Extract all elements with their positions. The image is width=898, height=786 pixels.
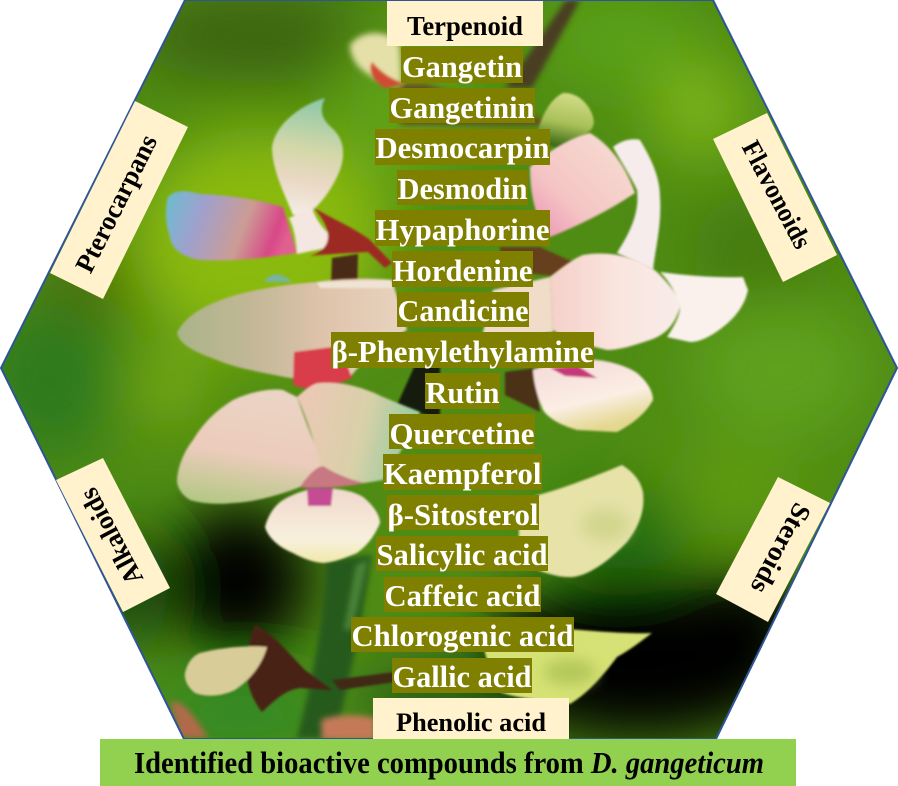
class label: Pterocarpans: Pterocarpans [69,130,163,277]
class label: Phenolic acid [373,698,569,740]
flower: lower big petals [177,382,420,504]
buds, top [350,33,594,148]
compound: Quercetine: Quercetine [390,416,534,451]
class label: Alkaloids [56,458,170,612]
title banner [100,739,796,786]
compound: Chlorogenic acid: Chlorogenic acid [352,618,574,653]
compound: Gangetin: Gangetin [402,49,522,84]
dried flower, bottom left [170,625,395,740]
title banner: Identified bioactive compounds from D. gangeticum [134,745,764,780]
flower: top right pink petals [530,133,660,270]
flower stem [297,0,580,738]
flower: brown calyx, right [500,247,573,276]
compound: β-Sitosterol: β-Sitosterol [388,497,539,532]
compound: β-Phenylethylamine: β-Phenylethylamine [332,334,594,369]
flower: lower right bud [505,359,653,432]
class label: Steroids: Steroids [745,498,817,599]
class label: Terpenoid [387,1,543,46]
compound: Desmocarpin: Desmocarpin [376,130,550,165]
class label: Alkaloids: Alkaloids [73,483,149,590]
compound: Desmodin: Desmodin [398,171,528,206]
class label: Flavonoids [713,113,837,282]
flower: centre right petals [480,254,748,350]
blurred yellow-green petals, lower right [480,465,652,704]
compound: Hypaphorine: Hypaphorine [376,212,550,247]
compound: Candicine: Candicine [398,293,528,328]
class label: Terpenoid: Terpenoid [407,11,523,41]
compound: Salicylic acid: Salicylic acid [376,537,548,572]
compound list [331,47,594,694]
class label: Pterocarpans [50,101,188,299]
compound: Kaempferol: Kaempferol [384,456,542,491]
compound: Caffeic acid: Caffeic acid [384,578,540,613]
class label: Phenolic acid: Phenolic acid [396,708,547,737]
class label: Flavonoids: Flavonoids [736,135,818,254]
flower: middle left petal [177,274,407,392]
compound: Gangetinin: Gangetinin [390,90,534,125]
compound: Rutin: Rutin [426,375,500,410]
flower: top left petals with red calyx [166,98,392,297]
compound: Hordenine: Hordenine [392,253,532,288]
class label: Steroids [716,477,830,622]
compound: Gallic acid: Gallic acid [392,659,532,694]
flower: bottom white bud [265,488,380,563]
